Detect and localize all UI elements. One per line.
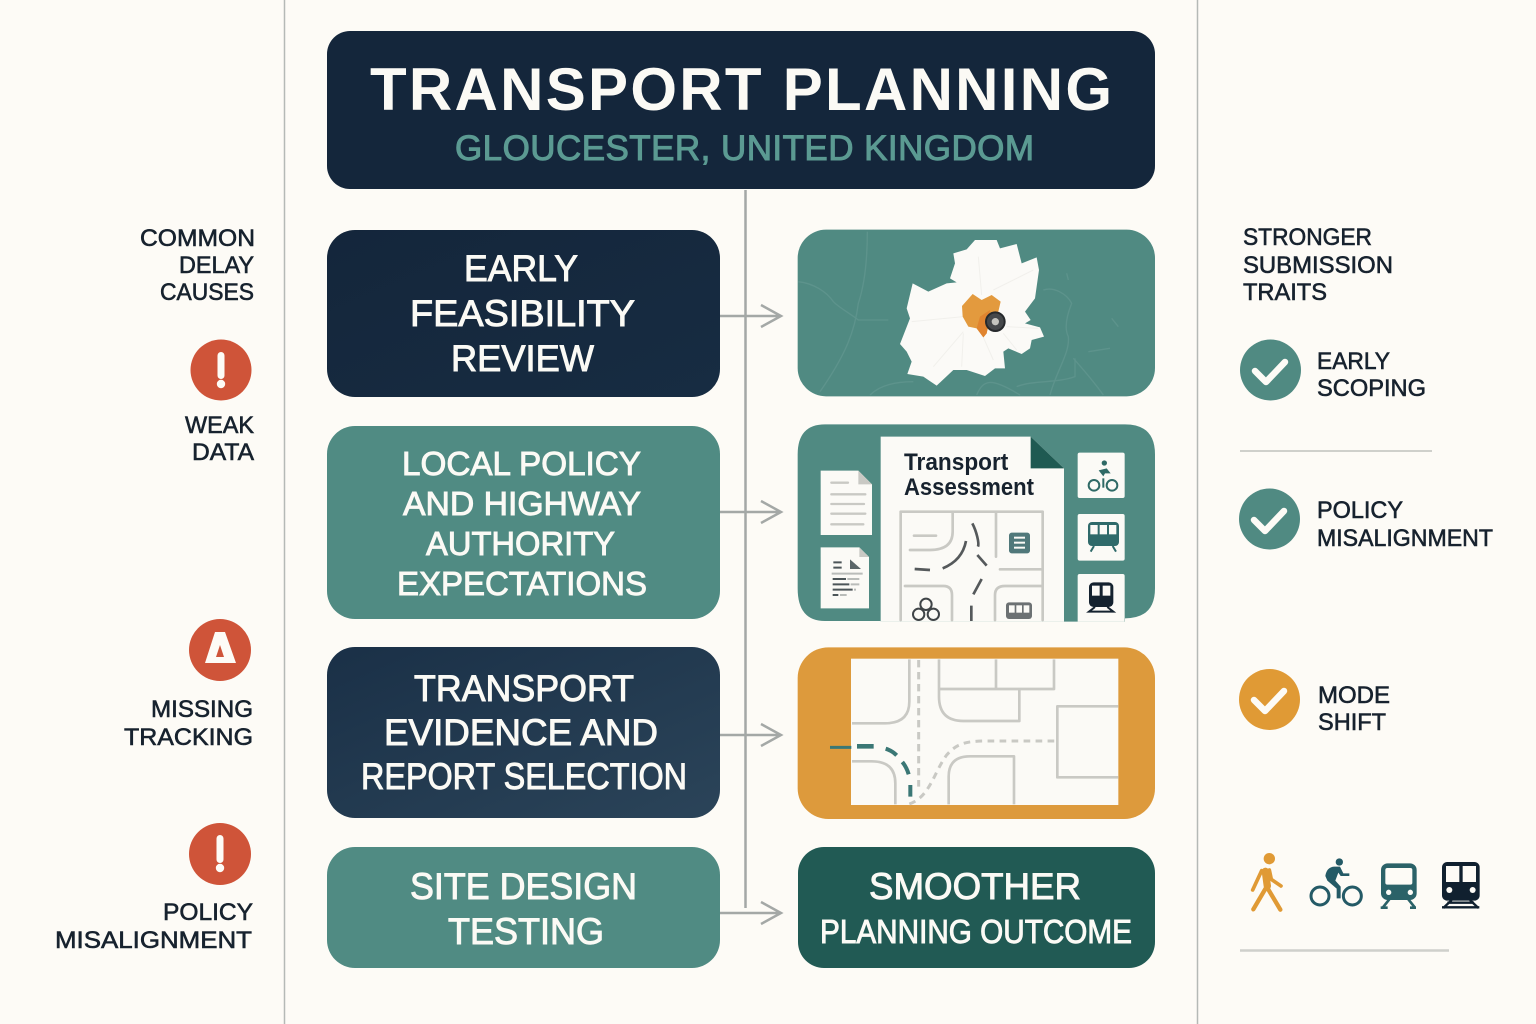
- step: local policy and highway authority expectations: AND HIGHWAY: [403, 486, 641, 523]
- arrow: to site plan: [720, 724, 781, 746]
- icon: walking: [1253, 853, 1281, 910]
- right heading: stronger submission traits: [1243, 224, 1393, 306]
- label: policy misalignment trait: POLICY: [1317, 497, 1403, 524]
- tile: cycling: [1078, 453, 1125, 498]
- faint roads: [798, 232, 1118, 395]
- right heading: stronger submission traits: STRONGER: [1243, 224, 1372, 251]
- tile: bus: [1078, 514, 1125, 561]
- arrow: to assessment: [720, 501, 781, 523]
- label: missing tracking: TRACKING: [124, 724, 253, 751]
- main document: Assessment: [904, 474, 1034, 501]
- icon: check policy misalignment: [1239, 488, 1300, 550]
- icon: check mode shift: [1239, 669, 1300, 730]
- mode icons row: [1253, 853, 1480, 910]
- step: local policy and highway authority expectations: LOCAL POLICY: [402, 446, 641, 483]
- step: early feasibility review: FEASIBILITY: [410, 293, 635, 334]
- arrow: to map: [720, 305, 781, 327]
- label: early scoping: SCOPING: [1317, 375, 1426, 402]
- step: transport evidence and report selection: TRANSPORT: [414, 668, 634, 709]
- icon: check early scoping: [1240, 340, 1301, 400]
- step: site design testing: SITE DESIGN: [410, 866, 637, 907]
- title banner: [327, 31, 1155, 189]
- outcome box: PLANNING OUTCOME: [820, 914, 1132, 951]
- step: transport evidence and report selection: REPORT SELECTION: [361, 756, 687, 797]
- icon: policy misalignment alert: [189, 823, 251, 885]
- left heading: common delay causes: [140, 225, 255, 306]
- label: mode shift: [1318, 682, 1390, 736]
- label: missing tracking: [124, 696, 253, 751]
- label: weak data: [185, 412, 254, 466]
- left heading: common delay causes: DELAY: [179, 252, 254, 279]
- label: policy misalignment: MISALIGNMENT: [55, 927, 252, 954]
- step: transport evidence and report selection: EVIDENCE AND: [384, 712, 658, 753]
- road layout: [830, 659, 1118, 804]
- label: policy misalignment trait: MISALIGNMENT: [1317, 525, 1493, 552]
- right heading: stronger submission traits: SUBMISSION: [1243, 252, 1393, 279]
- icon: train: [1442, 862, 1480, 908]
- icon: missing tracking warning: [189, 619, 251, 681]
- step: transport evidence and report selection: [327, 647, 720, 818]
- main document: [881, 437, 1064, 622]
- label: policy misalignment: POLICY: [163, 899, 253, 926]
- city outline: [900, 240, 1044, 386]
- panel: site plan on orange: [798, 647, 1155, 819]
- left heading: common delay causes: CAUSES: [160, 279, 254, 306]
- label: weak data: WEAK: [185, 412, 254, 439]
- step: local policy and highway authority expectations: EXPECTATIONS: [397, 566, 647, 603]
- label: missing tracking: MISSING: [151, 696, 253, 723]
- outcome box: SMOOTHER: [869, 866, 1081, 907]
- icon: cycling: [1311, 858, 1361, 905]
- label: policy misalignment trait: [1317, 497, 1493, 552]
- step: site design testing: [327, 847, 720, 968]
- panel: Gloucester map: [798, 230, 1155, 396]
- left heading: common delay causes: COMMON: [140, 225, 255, 252]
- label: policy misalignment: [55, 899, 253, 954]
- tile: train: [1078, 574, 1125, 622]
- icon: bus: [1381, 863, 1417, 908]
- step: local policy and highway authority expectations: AUTHORITY: [426, 526, 615, 563]
- panel: transport assessment documents: [798, 424, 1155, 622]
- label: weak data: DATA: [192, 439, 254, 466]
- location pin: [986, 312, 1005, 331]
- step: local policy and highway authority expectations: [327, 426, 720, 619]
- icon: weak data alert: [190, 340, 252, 400]
- arrow: to outcome: [720, 902, 781, 924]
- step: site design testing: TESTING: [448, 911, 604, 952]
- label: mode shift: SHIFT: [1318, 709, 1386, 736]
- label: early scoping: EARLY: [1317, 348, 1390, 375]
- step: early feasibility review: EARLY: [464, 248, 578, 289]
- label: early scoping: [1317, 348, 1426, 402]
- city centre: [962, 294, 1001, 337]
- side document 2: [821, 547, 869, 608]
- label: mode shift: MODE: [1318, 682, 1390, 709]
- side document 1: [821, 471, 872, 535]
- step: early feasibility review: [327, 230, 720, 397]
- main document: Transport: [904, 449, 1008, 476]
- right heading: stronger submission traits: TRAITS: [1243, 279, 1327, 306]
- step: early feasibility review: REVIEW: [451, 338, 594, 379]
- outcome box: [798, 847, 1155, 968]
- title banner: TRANSPORT PLANNING: [370, 56, 1112, 123]
- title banner: GLOUCESTER, UNITED KINGDOM: [455, 129, 1034, 168]
